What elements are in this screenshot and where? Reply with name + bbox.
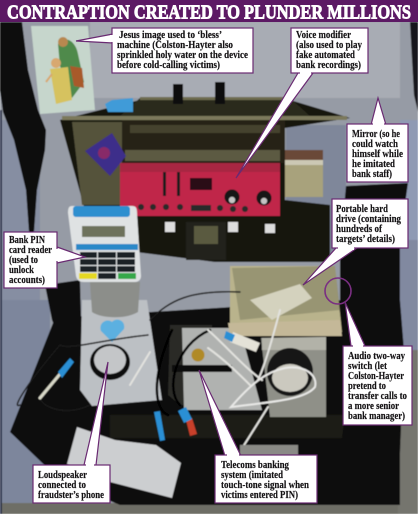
callout: audio two-way switch: pretend to [348,380,386,392]
blue tag [105,98,133,112]
loose paper notes [67,427,181,498]
red voice modifier [120,163,280,216]
callout: bank PIN card reader: Bank PIN [9,234,45,246]
callout: voice modifier [236,28,368,178]
callout: Jesus image: before cold-calling victims) [117,59,220,71]
telecom cable tab [240,445,298,455]
callout: telecoms banking system: touch-tone signal when [221,479,309,491]
callout: portable hard drive [303,199,408,285]
callout: telecoms banking system [199,370,317,503]
callout: bank PIN card reader [4,232,85,288]
callout: Jesus image: machine (Colston-Hayter also [117,39,233,51]
hard drive on notes [230,266,342,335]
callout: voice modifier: bank recordings) [296,59,361,71]
callout: loudspeaker [33,362,110,503]
callout: mirror: bank staff) [352,168,392,180]
callout: bank PIN card reader: unlock [9,264,35,276]
callout: mirror: could watch [352,138,398,150]
callout: loudspeaker: Loudspeaker [38,469,87,481]
callout: mirror [347,98,408,182]
right black bag side [340,183,408,505]
card reader base [90,282,140,317]
callout: portable hard drive: hundreds of [336,223,382,235]
callout: mirror: he imitated [352,158,395,170]
wires [17,292,315,459]
callout: voice modifier: (also used to play [296,39,362,51]
magnifier circle on audio switch [325,278,351,304]
beige box behind [285,150,323,197]
callout: portable hard drive: targets’ details) [336,233,395,245]
purple card [85,133,126,176]
callout: Jesus image: sprinkled holy water on the device [117,49,248,61]
callout: Jesus image [76,28,253,73]
callout: bank PIN card reader: accounts) [9,274,45,286]
callout: Jesus image: Jesus image used to ‘bless’ [119,29,222,41]
callout: audio two-way switch: Audio two-way [348,350,405,362]
Jesus image card [31,26,95,114]
lid and upper machine [60,100,350,262]
callout: bank PIN card reader: (used to [9,254,38,266]
callout: telecoms banking system: Telecoms banking [221,459,289,471]
callout: telecoms banking system: system (imitated [221,469,283,481]
callout: portable hard drive: Portable hard [336,203,388,215]
callout: loudspeaker: connected to [38,479,86,491]
callout: loudspeaker: fraudster’s phone [38,489,104,501]
callout: voice modifier: fake automated [296,49,355,61]
callout: telecoms banking system: victims entered PIN) [221,489,298,501]
callout: mirror: himself while [352,148,403,160]
black bag strap left [0,22,46,240]
right silver plate + speaker [261,337,326,417]
callout: mirror: Mirror (so he [352,128,400,140]
callout: voice modifier: Voice modifier [296,29,351,41]
callout: bank PIN card reader: card reader [9,244,52,256]
callout: audio two-way switch: switch (let [348,360,387,372]
silver speaker block [80,300,162,406]
callout: audio two-way switch: bank manager) [348,410,405,422]
callout: audio two-way switch [343,302,412,425]
case tray [10,300,400,505]
callout: portable hard drive: drive (containing [336,213,401,225]
callout: audio two-way switch: a more senior [348,400,399,412]
PIN reader [68,206,141,282]
